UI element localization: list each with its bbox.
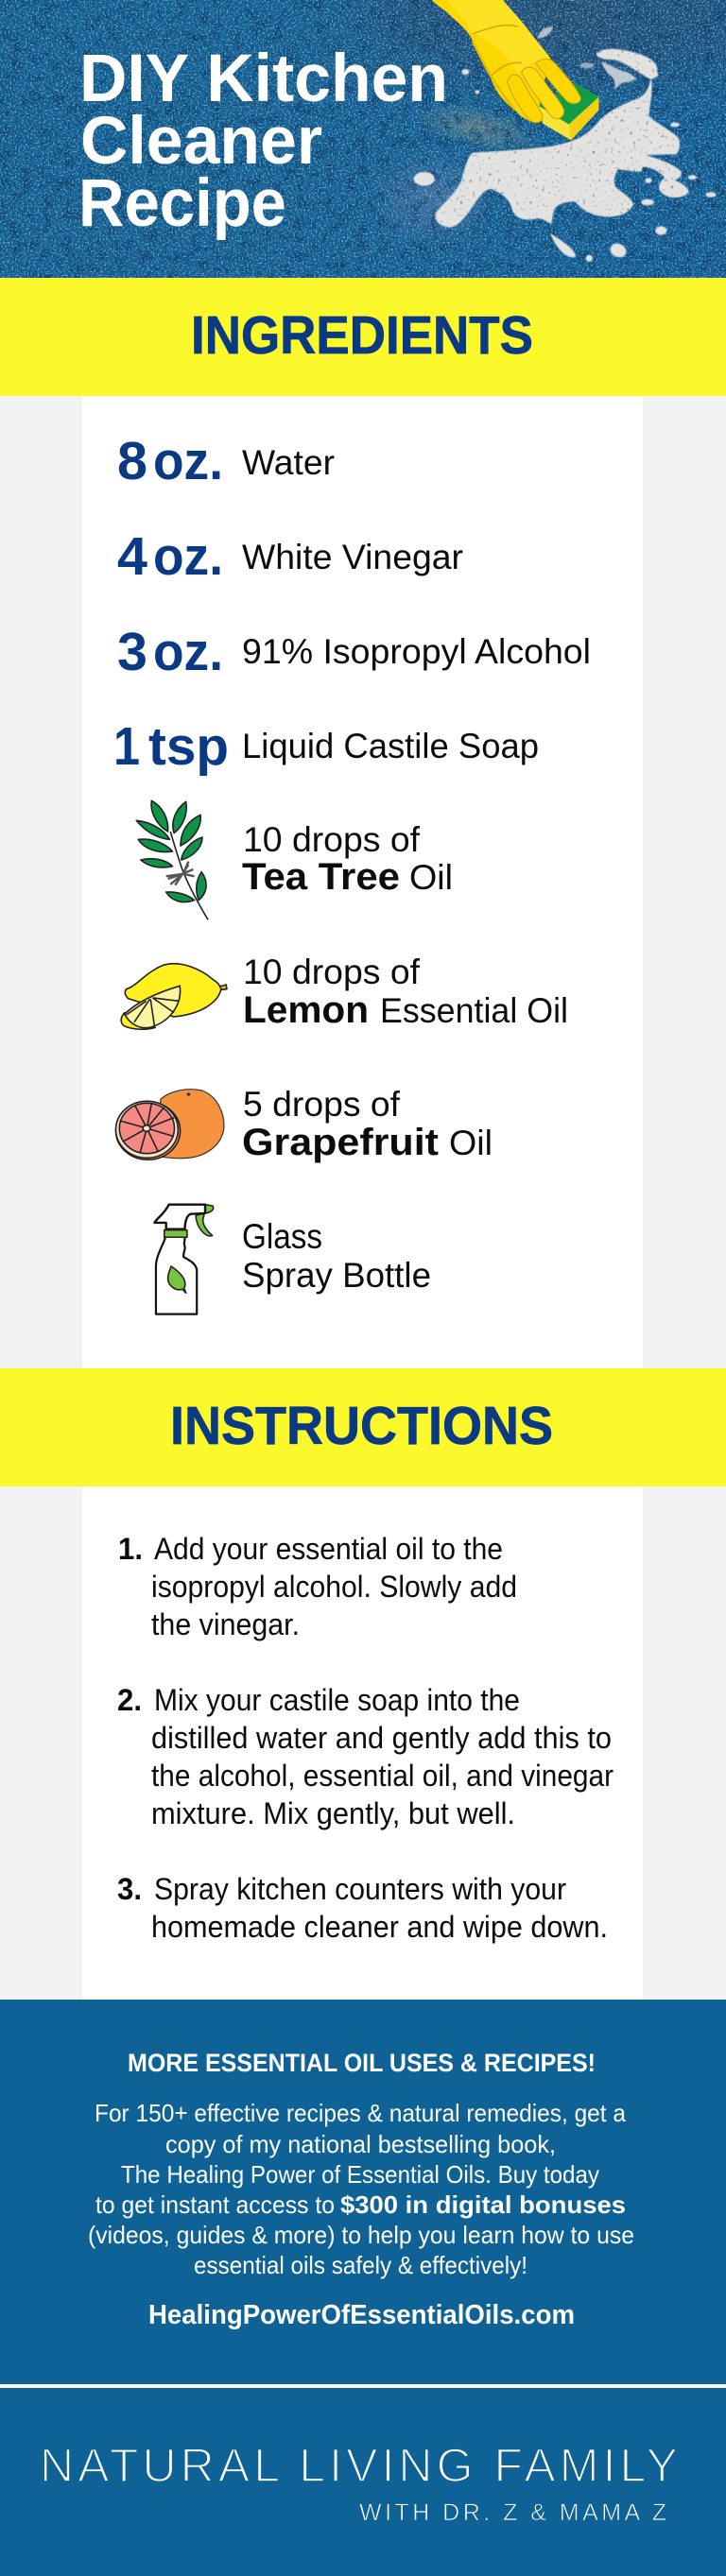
- icon: spray bottle: [154, 1205, 214, 1314]
- promo body text: to get instant access to: [95, 2190, 335, 2219]
- step 1: [118, 1532, 517, 1641]
- ingredient: 8 oz water: [117, 431, 335, 491]
- brand name: NATURAL LIVING FAMILY: [40, 2439, 678, 2492]
- ingredient: 4 oz white vinegar: [117, 526, 463, 587]
- icon: soap foam: [412, 26, 717, 263]
- ingredient: tea tree oil: 10 drops of: [243, 820, 421, 859]
- instructions heading band: INSTRUCTIONS: [170, 1396, 553, 1456]
- ingredient: tea tree oil: Tea Tree: [242, 856, 400, 898]
- ingredient: 4 oz white vinegar: 4: [117, 526, 147, 587]
- step 2: the alcohol, essential oil, and vinegar: [151, 1759, 614, 1793]
- step 2: mixture. Mix gently, but well.: [151, 1796, 515, 1830]
- ingredient: lemon essential oil: Lemon: [243, 989, 369, 1031]
- promo body text: essential oils safely & effectively!: [194, 2251, 527, 2279]
- ingredient: 4 oz white vinegar: White Vinegar: [242, 538, 463, 576]
- footer promo panel: [0, 2000, 726, 2384]
- brand footer: [0, 2384, 726, 2576]
- ingredient: 3 oz isopropyl alcohol: 91% Isopropyl Alcohol: [242, 632, 591, 671]
- step 2: 2.: [117, 1683, 142, 1717]
- icon: tea tree sprig: [136, 800, 208, 919]
- arm and back of hand: [432, 0, 551, 124]
- ingredient: 8 oz water: 8: [117, 431, 147, 491]
- step 3: homemade cleaner and wipe down.: [151, 1910, 608, 1944]
- step 1: 1.: [118, 1532, 143, 1566]
- icon: yellow glove with green sponge: [432, 0, 598, 140]
- ingredient: lemon essential oil: 10 drops of: [243, 953, 421, 991]
- promo body text: (videos, guides & more) to help you learn how to use: [88, 2221, 634, 2249]
- ingredient: 3 oz isopropyl alcohol: 3: [117, 622, 147, 682]
- ingredient: tea tree oil: Oil: [409, 858, 453, 897]
- header photo: gloved hand scrubbing foam on blue counter: [0, 0, 726, 278]
- ingredient: 3 oz isopropyl alcohol: oz.: [153, 622, 223, 682]
- brand tagline: WITH DR. Z & MAMA Z: [359, 2499, 666, 2526]
- title: DIY Kitchen: [79, 42, 448, 116]
- instruction steps: [117, 1532, 614, 1944]
- step 1: Add your essential oil to the: [154, 1532, 503, 1566]
- title: Recipe: [78, 166, 286, 241]
- ingredient: grapefruit oil: Oil: [449, 1124, 493, 1162]
- step 2: distilled water and gently add this to: [151, 1721, 612, 1755]
- step 3: [117, 1872, 608, 1944]
- ingredient: 3 oz isopropyl alcohol: [117, 622, 591, 682]
- ingredients heading band: INGREDIENTS: [191, 305, 533, 366]
- step 2: Mix your castile soap into the: [154, 1683, 520, 1717]
- step 1: isopropyl alcohol. Slowly add: [151, 1570, 517, 1604]
- ingredient: 1 tsp liquid castile soap: 1: [113, 716, 140, 777]
- instructions heading band: [0, 1368, 726, 1486]
- promo body text: $300 in digital bonuses: [340, 2190, 626, 2219]
- ingredient: 1 tsp liquid castile soap: Liquid Castile Soap: [242, 727, 539, 765]
- icon: grapefruit: [115, 1090, 224, 1159]
- ingredient: 1 tsp liquid castile soap: [113, 716, 539, 777]
- promo body text: [88, 2099, 634, 2279]
- ingredient: glass spray bottle: [154, 1205, 431, 1314]
- ingredient: lemon essential oil: [121, 953, 568, 1031]
- ingredient: 1 tsp liquid castile soap: tsp: [148, 716, 229, 777]
- step 3: 3.: [117, 1872, 142, 1906]
- promo body text: The Healing Power of Essential Oils. Buy today: [121, 2160, 599, 2189]
- promo body text: For 150+ effective recipes & natural remedies, get a: [95, 2099, 627, 2127]
- icon: lemon: [121, 964, 227, 1029]
- step 1: the vinegar.: [151, 1607, 300, 1641]
- ingredient: grapefruit oil: Grapefruit: [242, 1122, 439, 1163]
- step 3: Spray kitchen counters with your: [154, 1872, 566, 1906]
- website link: HealingPowerOfEssentialOils.com: [148, 2300, 575, 2330]
- white content panel: [82, 396, 643, 2002]
- ingredient: glass spray bottle: Glass: [242, 1217, 322, 1256]
- step 2: [117, 1683, 614, 1830]
- ingredient: tea tree oil: [136, 800, 453, 919]
- title: Cleaner: [80, 104, 322, 179]
- ingredient: 8 oz water: Water: [242, 443, 335, 482]
- fingers: [536, 60, 580, 104]
- ingredient: 8 oz water: oz.: [153, 431, 223, 491]
- promo heading: MORE ESSENTIAL OIL USES & RECIPES!: [128, 2049, 596, 2077]
- title: [78, 42, 448, 241]
- promo body text: copy of my national bestselling book,: [165, 2130, 556, 2158]
- ingredient: lemon essential oil: Essential Oil: [380, 991, 568, 1030]
- ingredient: grapefruit oil: 5 drops of: [243, 1085, 401, 1124]
- ingredient: 4 oz white vinegar: oz.: [153, 526, 223, 587]
- ingredients heading band: [0, 278, 726, 396]
- ingredient: glass spray bottle: Spray Bottle: [242, 1256, 431, 1295]
- ingredient: grapefruit oil: [115, 1085, 493, 1163]
- ingredient list: [113, 431, 591, 1314]
